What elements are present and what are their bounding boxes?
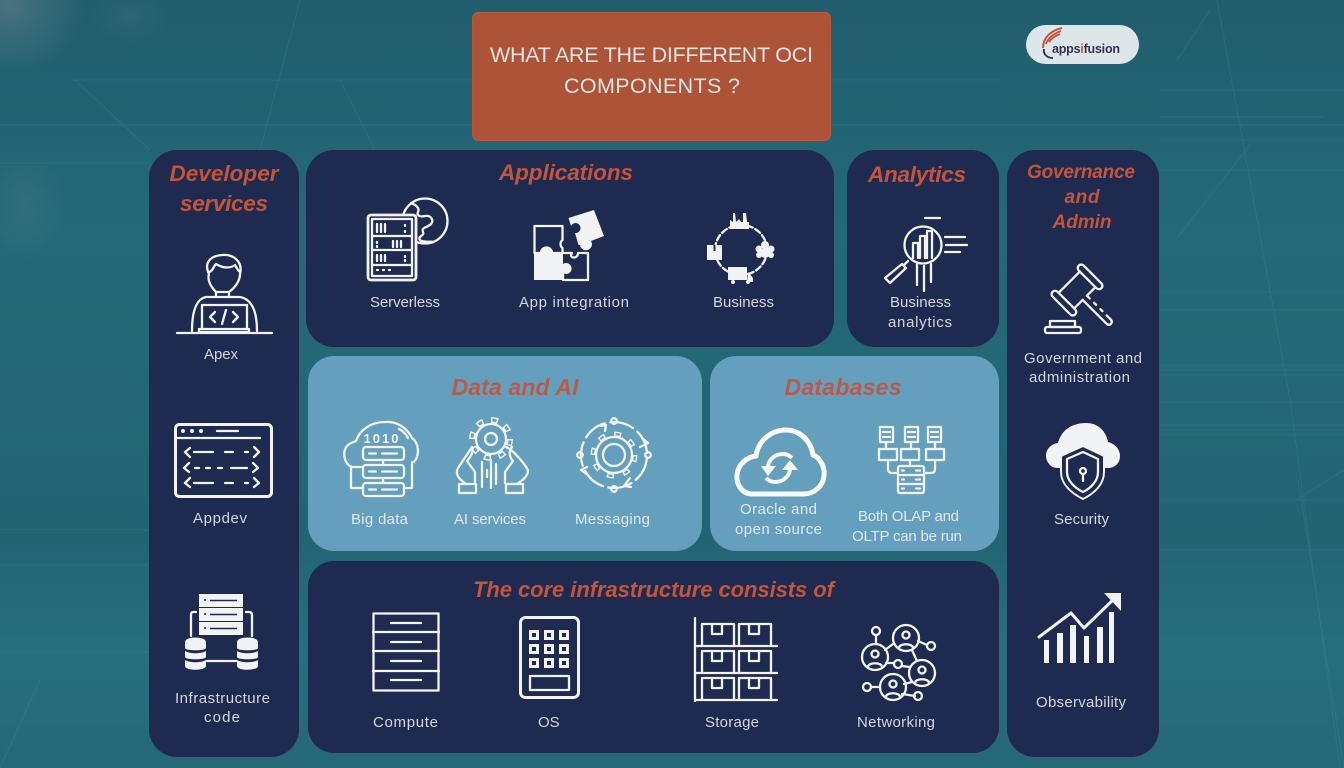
- item: compute: Compute: [373, 714, 438, 731]
- item: business analytics: Business: [890, 294, 951, 311]
- panel: data and AI: [308, 356, 702, 551]
- title: [472, 12, 830, 140]
- logo: apps i fusion: appsifusion: [1052, 42, 1120, 56]
- item: business: [707, 213, 774, 311]
- heading: governance and admin: Governance: [1027, 162, 1135, 183]
- item: compute: [373, 614, 439, 731]
- heading: governance and admin: and: [1064, 187, 1100, 208]
- item: big data: [344, 422, 418, 528]
- item: AI services: AI services: [454, 511, 526, 528]
- item: business analytics: [885, 218, 967, 331]
- panel: applications: [306, 150, 834, 347]
- item: oracle and open source: open source: [735, 521, 822, 538]
- item: OS: [520, 618, 578, 731]
- item: big data: Big data: [351, 511, 409, 528]
- item: storage: Storage: [705, 714, 759, 731]
- item: infrastructure code: code: [204, 709, 240, 726]
- heading: developer services: Developer: [170, 161, 280, 186]
- panel: developer services: [149, 150, 299, 757]
- item: big data: 1010: [364, 431, 400, 446]
- heading: developer services: services: [180, 191, 268, 216]
- item: networking: Networking: [857, 714, 935, 731]
- item: OS: OS: [538, 714, 560, 731]
- item: serverless: [368, 198, 448, 311]
- heading: data and AI: Data and AI: [452, 374, 579, 400]
- heading: applications: Applications: [498, 160, 633, 185]
- item: appdev: Appdev: [193, 510, 248, 527]
- panel: governance and admin: [1007, 150, 1159, 757]
- heading: developer services: [170, 161, 280, 216]
- item: messaging: [575, 418, 651, 528]
- item: both OLAP and OLTP: Both OLAP and: [858, 508, 959, 525]
- item: observability: [1036, 593, 1126, 711]
- item: observability: Observability: [1036, 694, 1126, 711]
- item: government and administration: administration: [1029, 369, 1130, 386]
- heading: analytics: Analytics: [867, 162, 966, 187]
- item: infrastructure code: Infrastructure: [175, 690, 270, 707]
- item: security: [1046, 423, 1120, 528]
- item: oracle and open source: [735, 430, 824, 538]
- item: appdev: [176, 424, 272, 527]
- title: WHAT ARE THE DIFFERENT OCI: [490, 43, 813, 67]
- item: app integration: App integration: [519, 294, 629, 311]
- title: COMPONENTS ?: [564, 74, 740, 98]
- item: app integration: [519, 210, 629, 311]
- panel: core infrastructure: [308, 561, 999, 753]
- heading: databases: Databases: [784, 374, 902, 400]
- heading: governance and admin: Admin: [1052, 212, 1112, 233]
- item: government and administration: [1024, 263, 1142, 386]
- heading: core infrastructure: The core infrastructure consists of: [473, 577, 837, 602]
- item: storage: [695, 618, 777, 731]
- panel: databases: [710, 356, 999, 551]
- item: networking: [857, 625, 935, 731]
- item: oracle and open source: Oracle and: [740, 501, 817, 518]
- item: AI services: [454, 420, 528, 528]
- item: messaging: Messaging: [575, 511, 650, 528]
- heading: governance and admin: [1027, 162, 1135, 233]
- item: apex: [177, 255, 272, 363]
- logo: apps i fusion: [1026, 25, 1139, 64]
- item: apex: Apex: [204, 346, 238, 363]
- item: business analytics: analytics: [888, 314, 952, 331]
- item: both OLAP and OLTP: [852, 427, 962, 545]
- item: infrastructure code: [175, 594, 270, 726]
- item: business: Business: [713, 294, 774, 311]
- item: government and administration: Government and: [1024, 350, 1142, 367]
- panel: analytics: [847, 150, 999, 347]
- item: security: Security: [1054, 511, 1110, 528]
- item: serverless: Serverless: [370, 294, 440, 311]
- item: both OLAP and OLTP: OLTP can be run: [852, 528, 962, 545]
